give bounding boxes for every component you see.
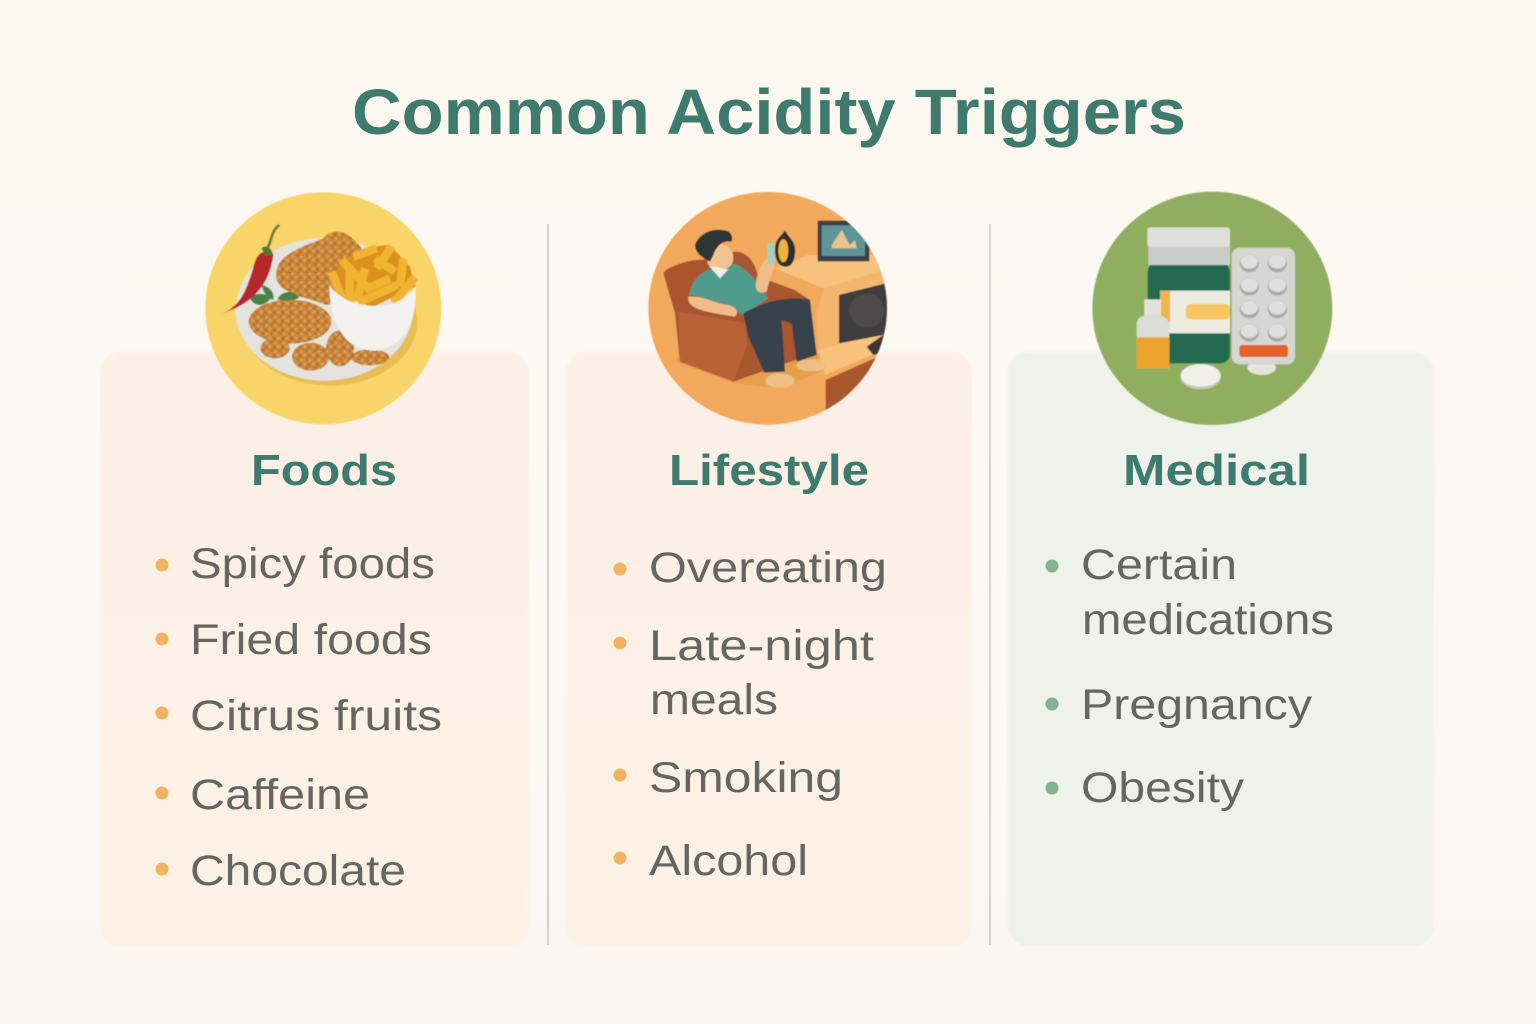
foods list: [156, 540, 442, 895]
foods list: Fried foods: [190, 616, 432, 664]
foods list: Caffeine: [190, 771, 370, 819]
panel: foods: [100, 192, 529, 946]
lifestyle list: Alcohol: [649, 837, 808, 885]
foods list: Chocolate: [190, 847, 406, 895]
foods heading: Foods: [251, 446, 397, 495]
panel: medical: [1008, 192, 1434, 946]
lifestyle list: Late-night: [649, 622, 874, 670]
foods list: Spicy foods: [190, 540, 435, 588]
medical heading: Medical: [1123, 446, 1310, 495]
medical list: Obesity: [1081, 764, 1245, 812]
lifestyle list: meals: [650, 676, 778, 724]
medical card background: [1008, 352, 1434, 946]
icon: plate of fried food: [205, 192, 441, 424]
foods list: Citrus fruits: [190, 692, 442, 740]
lifestyle card background: [566, 352, 972, 946]
icon: medicine bottles and pills: [1092, 192, 1332, 425]
title: Common Acidity Triggers: [352, 76, 1186, 148]
panel: lifestyle: [566, 190, 972, 946]
lifestyle list: Overeating: [649, 544, 887, 592]
medical list: Certain: [1081, 541, 1237, 589]
medical list: [1046, 541, 1334, 812]
medical list: medications: [1082, 596, 1334, 644]
icon: man on armchair watching TV: [645, 190, 895, 427]
lifestyle list: [614, 544, 887, 885]
lifestyle heading: Lifestyle: [669, 446, 869, 495]
foods card background: [100, 352, 529, 946]
medical list: Pregnancy: [1081, 681, 1313, 729]
lifestyle list: Smoking: [649, 754, 843, 802]
